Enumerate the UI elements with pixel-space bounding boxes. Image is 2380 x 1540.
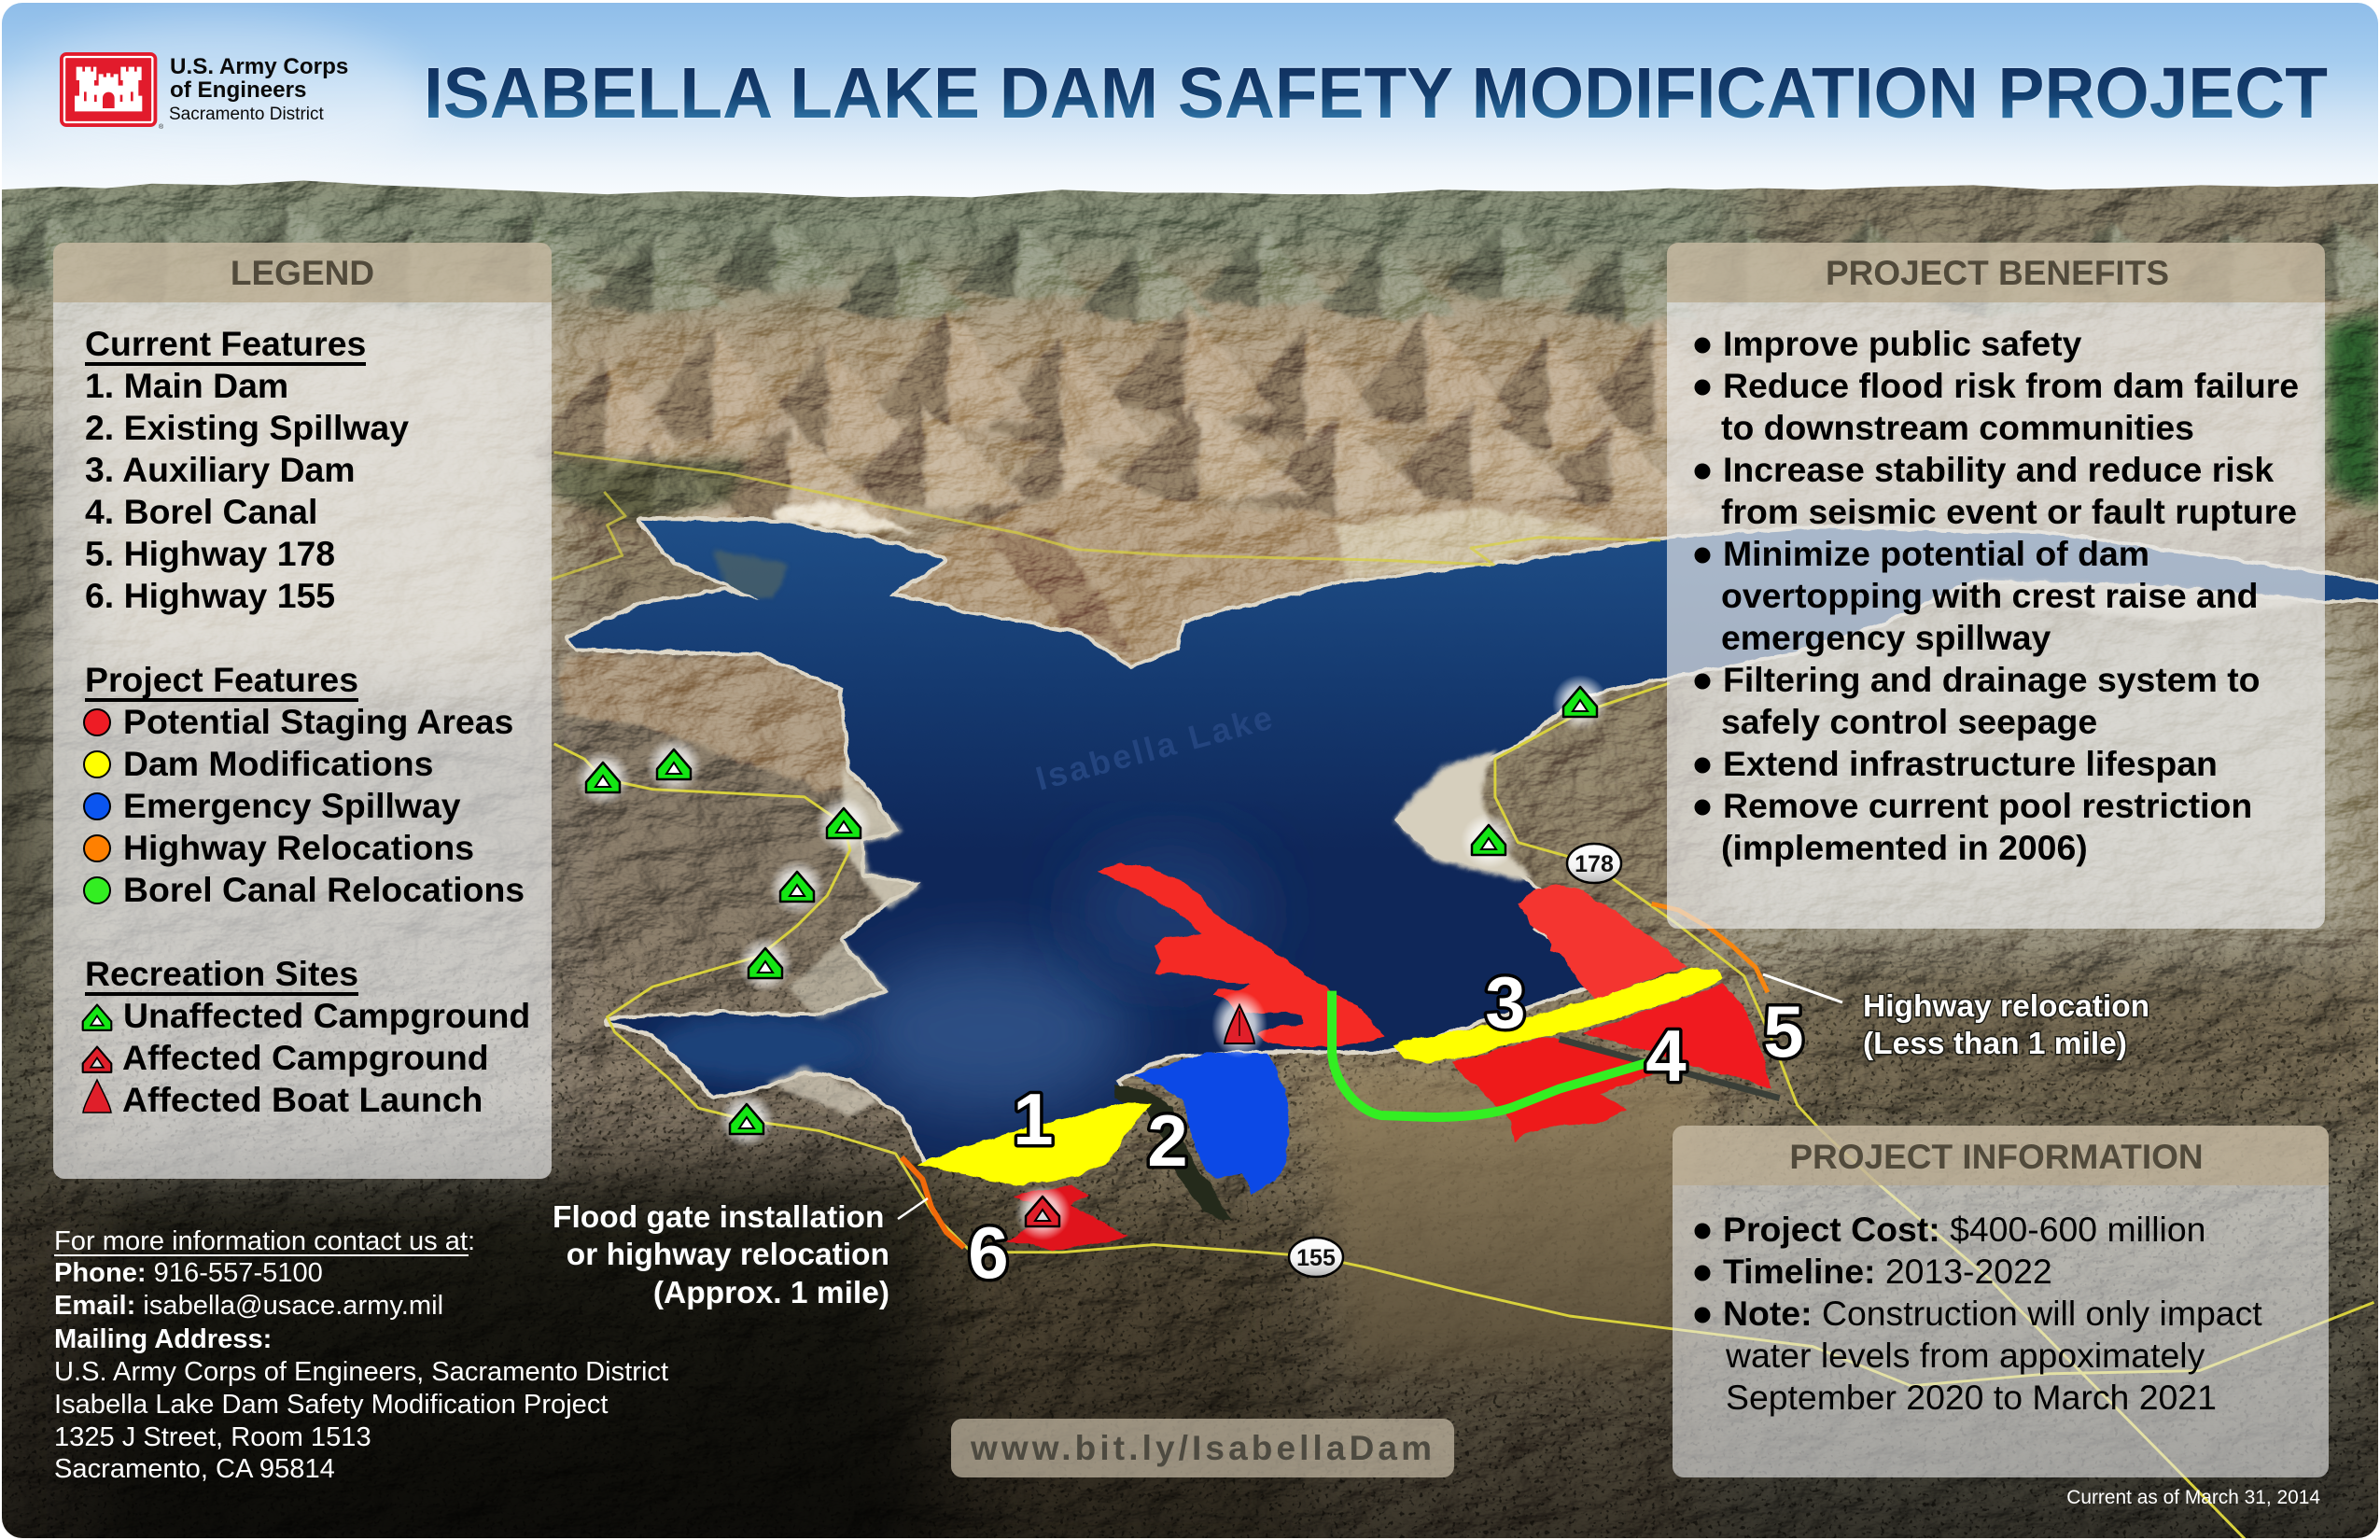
current features list: 5. Highway 178 <box>85 534 335 573</box>
callout: flood gate: Flood gate installation <box>553 1200 884 1235</box>
benefits list: Reduce flood risk from dam failure <box>1723 366 2299 405</box>
callout: highway relocation: Highway relocation <box>1863 989 2149 1024</box>
lake tones <box>652 550 1260 1115</box>
current features list: Current Features <box>85 324 366 363</box>
contact information: Mailing Address: <box>54 1324 272 1354</box>
contact information: Email: isabella@usace.army.mil <box>54 1291 443 1321</box>
benefits list: (implemented in 2006) <box>1721 828 2088 867</box>
callout: highway relocation: (Less than 1 mile) <box>1863 1027 2127 1061</box>
information heading: PROJECT INFORMATION <box>1789 1138 2204 1176</box>
panel: legend <box>53 243 552 1179</box>
unaffected campground 2 <box>646 737 702 793</box>
benefits list: Filtering and drainage system to <box>1723 660 2261 699</box>
castle badge <box>60 52 157 127</box>
farmland <box>2325 311 2380 509</box>
logo: US Army Corps of Engineers <box>60 52 348 131</box>
current features list: 1. Main Dam <box>85 366 288 405</box>
website pill <box>951 1419 1454 1477</box>
staging area: peninsula <box>1098 863 1384 1047</box>
recreation sites list: Unaffected Campground <box>123 996 530 1035</box>
benefits list: Increase stability and reduce risk <box>1723 450 2274 489</box>
project features list: Dam Modifications <box>123 744 433 783</box>
unaffected campground 1 <box>575 750 631 806</box>
staging area: east triangle <box>1583 983 1771 1087</box>
highway 178 sign <box>1567 844 1621 883</box>
benefits list <box>1695 324 2299 867</box>
feature number 6: 6 <box>968 1211 1009 1294</box>
unaffected campground 8 <box>1461 813 1517 869</box>
feature number 1: 1 <box>1013 1078 1054 1160</box>
auxiliary dam modification <box>1393 968 1723 1062</box>
lake <box>569 521 2380 1159</box>
current features list: 2. Existing Spillway <box>85 408 409 447</box>
project features list: Potential Staging Areas <box>123 702 513 741</box>
contact information: Phone: 916-557-5100 <box>54 1258 323 1288</box>
contact information: Sacramento, CA 95814 <box>54 1454 335 1484</box>
recreation sites list: Affected Boat Launch <box>122 1080 483 1119</box>
legend header <box>53 243 552 302</box>
lake group <box>569 521 2380 1159</box>
highway relocation east <box>1652 903 1768 992</box>
mountain ridges <box>0 205 2380 790</box>
contact information: For more information contact us at: <box>54 1226 475 1256</box>
feature number 2: 2 <box>1147 1099 1188 1182</box>
lakeside bluff <box>888 478 1670 668</box>
information header <box>1673 1126 2329 1185</box>
feature number 5: 5 <box>1763 990 1804 1072</box>
main dam modification <box>917 1103 1152 1185</box>
project features list <box>84 660 525 909</box>
benefits list: from seismic event or fault rupture <box>1721 492 2297 531</box>
project features list: Project Features <box>85 660 358 699</box>
shoreline flats <box>766 580 2322 1115</box>
information body <box>1673 1185 2329 1477</box>
current features list <box>85 324 409 615</box>
benefits list: Remove current pool restriction <box>1723 786 2252 825</box>
title: ISABELLA LAKE DAM SAFETY MODIFICATION PROJECT <box>424 53 2328 133</box>
callout: flood gate: (Approx. 1 mile) <box>653 1276 889 1310</box>
benefits list: safely control seepage <box>1721 702 2097 741</box>
information list: water levels from appoximately <box>1725 1336 2205 1375</box>
current features list: 3. Auxiliary Dam <box>85 450 356 489</box>
benefits list: to downstream communities <box>1721 408 2194 447</box>
legend body <box>53 302 552 1179</box>
logo: US Army Corps of Engineers: ® <box>159 123 164 131</box>
benefits list: emergency spillway <box>1721 618 2051 657</box>
date note: Current as of March 31, 2014 <box>2066 1487 2320 1508</box>
roads <box>550 453 2374 1539</box>
panel: project benefits <box>1667 243 2325 929</box>
contact information: Isabella Lake Dam Safety Modification Project <box>54 1390 608 1420</box>
callout: flood gate <box>553 1198 928 1310</box>
website pill: www.bit.ly/IsabellaDam <box>970 1429 1432 1467</box>
callout: highway relocation <box>1763 974 2149 1061</box>
affected boat launch <box>1211 991 1267 1058</box>
title: ISABELLA LAKE DAM SAFETY MODIFICATION PROJECT <box>424 53 2328 133</box>
staging area: south west <box>1006 1185 1127 1252</box>
unaffected campground 3 <box>816 796 872 852</box>
logo text: U.S. Army Corps <box>170 54 348 79</box>
speckle <box>0 887 2380 1540</box>
sky glow behind logo <box>4 7 426 151</box>
recreation sites list: Affected Campground <box>122 1038 489 1077</box>
legend heading: LEGEND <box>231 254 374 292</box>
recreation sites list: Recreation Sites <box>85 954 358 993</box>
feature number 3: 3 <box>1485 961 1526 1043</box>
current features list: 4. Borel Canal <box>85 492 317 531</box>
recreation sites list <box>83 954 530 1119</box>
benefits body <box>1667 302 2325 929</box>
salt flat <box>774 501 918 534</box>
lake name: Isabella Lake <box>1031 697 1279 798</box>
unaffected campground 7 <box>1552 675 1608 731</box>
information list: September 2020 to March 2021 <box>1726 1378 2217 1417</box>
benefits list: Extend infrastructure lifespan <box>1723 744 2218 783</box>
information list: Project Cost: $400-600 million <box>1723 1210 2205 1249</box>
contact information: U.S. Army Corps of Engineers, Sacramento District <box>54 1357 668 1387</box>
project features list: Highway Relocations <box>123 828 474 867</box>
project overlays <box>917 863 1771 1252</box>
unaffected campground 6 <box>719 1092 775 1148</box>
benefits list: Improve public safety <box>1723 324 2082 363</box>
lake shoreline <box>569 521 2380 1159</box>
information list: Note: Construction will only impact <box>1723 1294 2262 1333</box>
benefits list: Minimize potential of dam <box>1723 534 2149 573</box>
staging area: south <box>1452 1038 1652 1141</box>
benefits heading: PROJECT BENEFITS <box>1826 254 2169 292</box>
logo: US Army Corps of Engineers: Sacramento District <box>169 105 324 124</box>
affected campground <box>1015 1184 1071 1240</box>
callout: flood gate: or highway relocation <box>567 1238 889 1272</box>
current features list: 6. Highway 155 <box>85 576 335 615</box>
unaffected campground 4 <box>769 860 825 916</box>
existing spillway channel <box>1113 1085 1232 1221</box>
logo: US Army Corps of Engineers: of Engineers <box>170 77 306 103</box>
contact information: 1325 J Street, Room 1513 <box>54 1422 371 1452</box>
information list <box>1695 1210 2262 1417</box>
sky <box>0 0 2380 210</box>
highway relocation west <box>902 1157 964 1248</box>
information list: Timeline: 2013-2022 <box>1723 1252 2052 1291</box>
project features list: Emergency Spillway <box>123 786 461 825</box>
borel canal relocation <box>1332 991 1648 1117</box>
tan plain below auxiliary dam <box>1307 1073 1708 1372</box>
benefits header <box>1667 243 2325 302</box>
contact information <box>54 1226 668 1484</box>
highway 155 sign <box>1289 1238 1343 1277</box>
emergency spillway <box>1134 1052 1289 1195</box>
highway 155 sign: 155 <box>1296 1245 1336 1271</box>
borel canal line <box>1560 1039 1780 1099</box>
feature number 4: 4 <box>1645 1015 1687 1097</box>
wetland strip <box>551 459 747 523</box>
highway 178 sign: 178 <box>1575 851 1614 877</box>
staging area: north east <box>1518 884 1687 999</box>
panel: project information <box>1673 1126 2329 1477</box>
bottom shade <box>0 1073 2380 1540</box>
benefits list: overtopping with crest raise and <box>1721 576 2259 615</box>
project features list: Borel Canal Relocations <box>123 870 525 909</box>
unaffected campground 5 <box>737 936 793 992</box>
